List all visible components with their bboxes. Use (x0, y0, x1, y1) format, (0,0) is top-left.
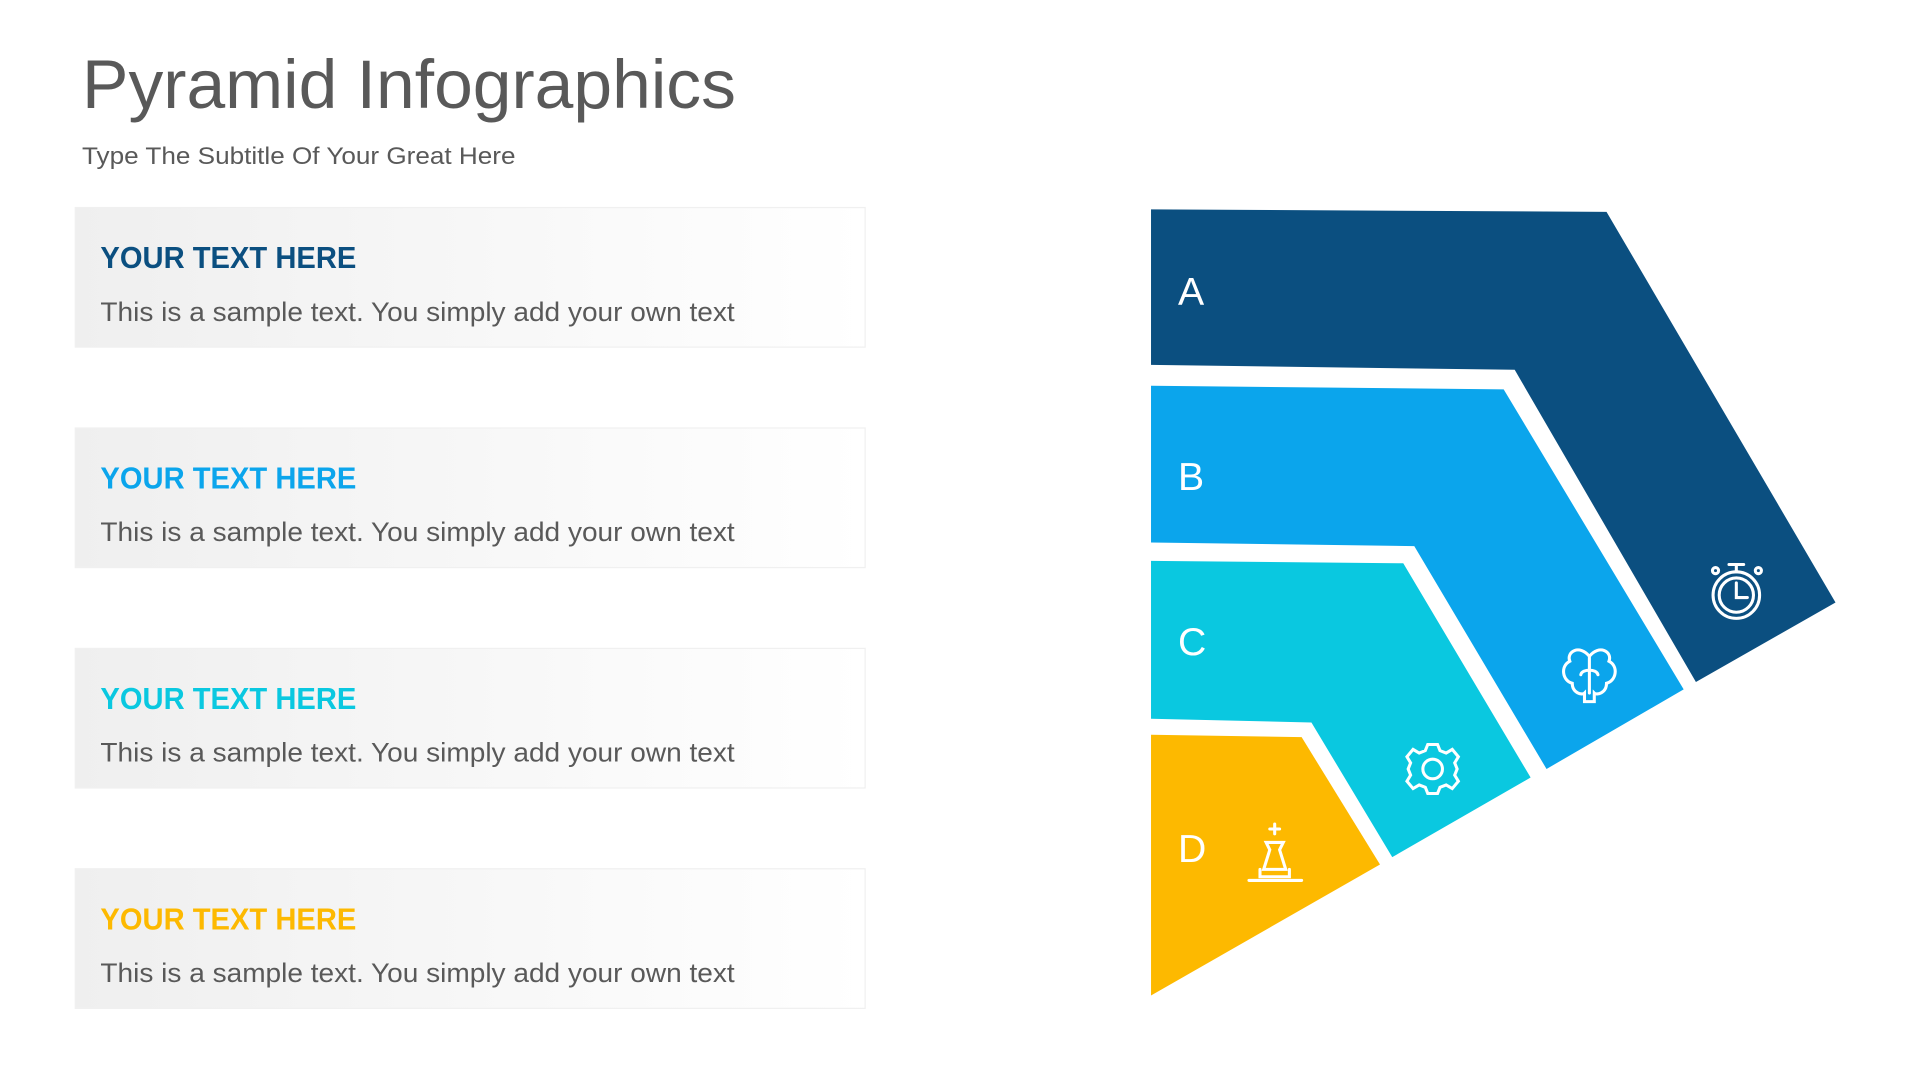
card C: YOUR TEXT HERE (100, 682, 356, 716)
segment A (1151, 209, 1836, 682)
card D (75, 869, 865, 1008)
icon: stopwatch (1712, 564, 1761, 618)
card A (75, 208, 865, 347)
title: Pyramid Infographics (82, 46, 736, 123)
card D: This is a sample text. You simply add your own text (100, 958, 735, 988)
subtitle: Type The Subtitle Of Your Great Here (82, 143, 516, 170)
card B: This is a sample text. You simply add your own text (100, 517, 735, 547)
card C: This is a sample text. You simply add your own text (100, 738, 735, 768)
segment D (1151, 735, 1380, 996)
icon: chess king (1249, 824, 1302, 880)
icon: brain (1564, 650, 1615, 702)
segment B: B (1178, 456, 1204, 499)
card D: YOUR TEXT HERE (100, 902, 356, 936)
segment C (1151, 561, 1531, 857)
segment B (1151, 386, 1684, 769)
card A: This is a sample text. You simply add your own text (100, 297, 735, 327)
card B (75, 428, 865, 568)
pyramid (1151, 209, 1836, 996)
icon: gear (1407, 744, 1458, 793)
card B: YOUR TEXT HERE (100, 462, 356, 496)
segment C: C (1178, 621, 1206, 664)
card C (75, 648, 865, 788)
card A: YOUR TEXT HERE (100, 241, 356, 275)
segment A: A (1178, 271, 1205, 314)
segment D: D (1178, 828, 1206, 871)
